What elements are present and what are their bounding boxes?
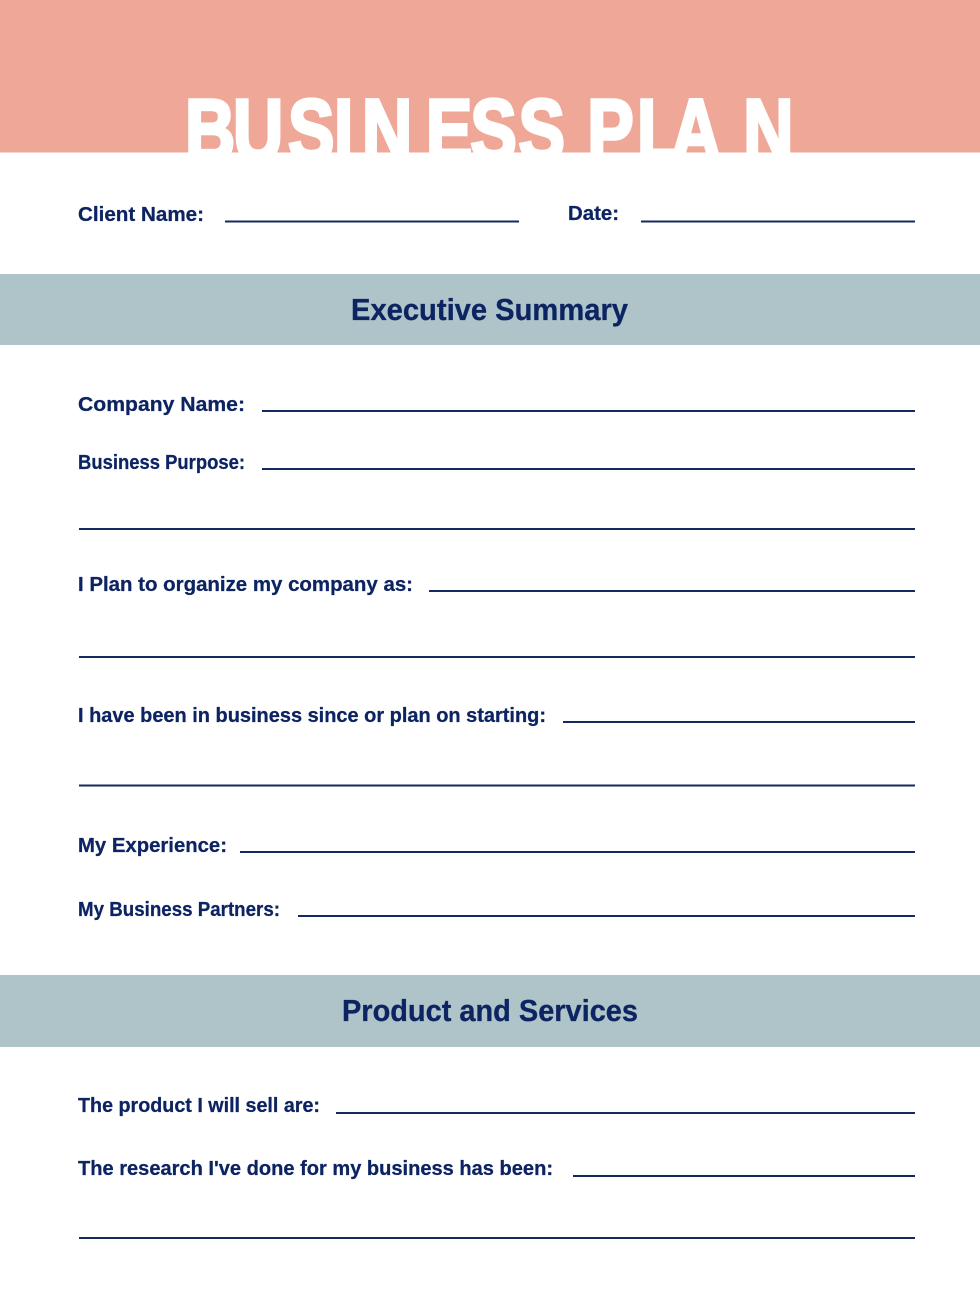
date field: Date: bbox=[568, 203, 619, 225]
field: research: The research I've done for my business has been: bbox=[78, 1158, 553, 1180]
section heading: executive summary: Executive Summary bbox=[351, 292, 629, 327]
section heading: product and services: Product and Services bbox=[342, 993, 638, 1028]
section heading: executive summary bbox=[0, 274, 980, 345]
field: products: The product I will sell are: bbox=[78, 1095, 320, 1117]
header banner with title bbox=[0, 0, 980, 152]
field: business start: I have been in business since or plan on starting: bbox=[78, 705, 546, 727]
field: company organization: I Plan to organize my company as: bbox=[78, 574, 413, 596]
field: my business partners: My Business Partners: bbox=[78, 899, 280, 921]
field: business purpose: Business Purpose: bbox=[78, 452, 245, 474]
field: my experience: My Experience: bbox=[78, 835, 227, 857]
client name field: Client Name: bbox=[78, 204, 204, 226]
section heading: product and services bbox=[0, 975, 980, 1047]
field: company name: Company Name: bbox=[78, 394, 245, 416]
header banner with title: BUSINESS PLAN bbox=[185, 82, 793, 179]
